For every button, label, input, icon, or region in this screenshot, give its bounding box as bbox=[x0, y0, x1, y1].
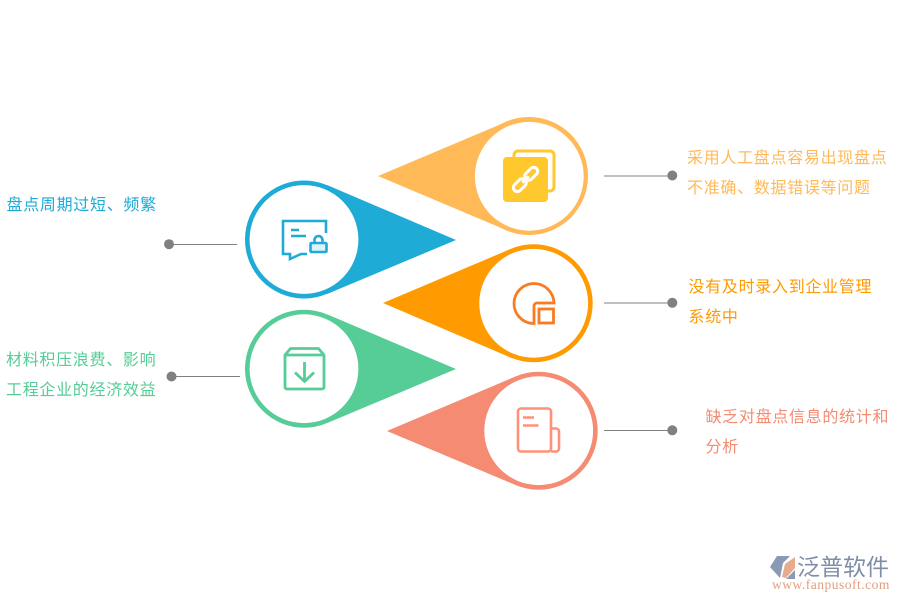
text: salmon callout: 缺乏对盘点信息的统计和 bbox=[706, 409, 889, 426]
icon: message with lock bbox=[283, 221, 326, 259]
text: orange callout: 系统中 bbox=[688, 309, 739, 326]
logo url: www.fanpusoft.com bbox=[772, 577, 890, 592]
connector: light orange bbox=[604, 170, 677, 180]
teardrop: blue bbox=[245, 180, 456, 298]
connector: blue bbox=[164, 239, 237, 249]
text: green callout: 工程企业的经济效益 bbox=[6, 382, 156, 399]
icon: pie with square bbox=[514, 284, 554, 324]
teardrop: light orange bbox=[378, 117, 588, 235]
connector: orange bbox=[604, 298, 677, 308]
text: orange callout bbox=[688, 278, 872, 326]
icon: document bbox=[518, 408, 559, 452]
text: green callout bbox=[6, 351, 156, 399]
text: blue callout: 盘点周期过短、频繁 bbox=[6, 197, 157, 214]
teardrop: salmon bbox=[387, 372, 598, 490]
text: salmon callout bbox=[706, 408, 889, 456]
text: light orange callout bbox=[687, 149, 887, 197]
text: green callout: 材料积压浪费、影响 bbox=[6, 352, 156, 369]
text: light orange callout: 采用人工盘点容易出现盘点 bbox=[687, 150, 887, 167]
icon: box with down arrow bbox=[285, 348, 324, 389]
text: salmon callout: 分析 bbox=[706, 439, 739, 456]
logo name: 泛普软件 bbox=[797, 554, 889, 580]
logo mark bbox=[770, 556, 795, 579]
connector: salmon bbox=[604, 425, 677, 435]
teardrop: orange bbox=[383, 244, 593, 362]
teardrop: green bbox=[245, 310, 456, 428]
connector: green bbox=[166, 372, 240, 382]
logo wordmark bbox=[772, 554, 890, 592]
text: orange callout: 没有及时录入到企业管理 bbox=[688, 279, 872, 296]
icon: linked documents bbox=[503, 151, 554, 202]
text: light orange callout: 不准确、数据错误等问题 bbox=[687, 180, 871, 197]
